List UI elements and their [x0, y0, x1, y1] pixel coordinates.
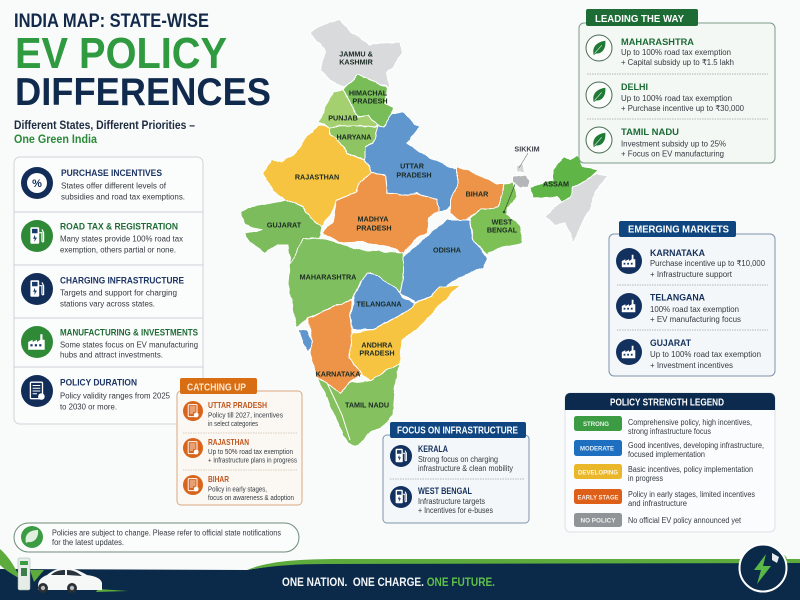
tab: emerging markets: [619, 221, 736, 237]
state: Rajasthan: Up to 50% road tax exemption: [208, 449, 293, 456]
legend: moderate: Good incentives, developing infrastructure,: [628, 441, 764, 450]
state: Madhya Pradesh: PRADESH: [356, 224, 392, 232]
footer band: [0, 544, 800, 600]
legend header: [565, 393, 775, 410]
state: Uttar Pradesh: PRADESH: [396, 170, 432, 180]
legend: early stage: [574, 489, 755, 508]
panel background: [14, 157, 203, 424]
state: Tamil Nadu: + Focus on EV manufacturing: [621, 150, 724, 158]
row: purchase incentives: subsidies and road tax exemptions.: [61, 192, 185, 202]
icon: green leaf: [21, 526, 43, 548]
state: Goa: [298, 329, 313, 353]
subtitle: Different States, Different Priorities –: [14, 120, 196, 132]
row: purchase incentives: [21, 167, 185, 202]
state: Karnataka: + Infrastructure support: [650, 270, 733, 279]
tab: catching up: CATCHING UP: [187, 382, 246, 394]
panel: emerging markets: [609, 221, 775, 376]
row: road tax and registration: [21, 220, 183, 254]
state: Kerala: KERALA: [418, 444, 448, 454]
state: Maharashtra: [288, 238, 405, 328]
state: Gujarat: GUJARAT: [650, 338, 691, 349]
state: Odisha: [400, 220, 488, 302]
tab: focus on infrastructure: [390, 422, 526, 438]
panel background: [177, 391, 302, 505]
state: Tamil Nadu: Investment subsidy up to 25%: [621, 140, 726, 148]
state: Tamil Nadu: [586, 127, 726, 158]
state: Tamil Nadu and Kerala: TAMIL NADU: [345, 400, 389, 410]
panel: focus on infrastructure: [383, 422, 529, 523]
panel: catching up: [177, 378, 302, 505]
state: Karnataka: [616, 248, 766, 279]
state: Tamil Nadu and Kerala: [317, 363, 400, 447]
legend: moderate: [574, 440, 764, 459]
legend: no policy: No official EV policy announced yet: [628, 516, 742, 525]
state: Telangana: + EV manufacturing focus: [650, 315, 741, 324]
state: Uttar Pradesh: UTTAR PRADESH: [208, 401, 267, 410]
state: Punjab: PUNJAB: [328, 114, 358, 122]
state: Odisha: ODISHA: [433, 246, 461, 254]
legend: developing: [574, 464, 753, 483]
state: Rajasthan: RAJASTHAN: [208, 438, 249, 447]
map of India: [240, 20, 607, 447]
state: Delhi: + Purchase incentive up to ₹30,000: [621, 104, 745, 113]
state: Gujarat: [240, 200, 322, 265]
state: Himachal Pradesh: [343, 75, 393, 127]
panel background: [609, 234, 775, 376]
title block: [14, 11, 271, 146]
legend: developing: DEVELOPING: [578, 470, 618, 476]
state: Bihar: focus on awareness & adoption: [208, 495, 294, 502]
panel: policy factors: [14, 157, 203, 424]
row: purchase incentives: States offer different levels of: [61, 182, 167, 190]
state: Karnataka: [308, 300, 362, 393]
state: West Bengal: [470, 182, 523, 255]
panel: policy strength legend: [565, 393, 775, 532]
panel background: [565, 393, 775, 532]
panel background: [579, 23, 775, 163]
legend: moderate: focused implementation: [628, 450, 705, 459]
state: Gujarat: + Investment incentives: [650, 361, 733, 370]
state: Gujarat: GUJARAT: [267, 220, 302, 230]
state: West Bengal: WEST: [492, 218, 513, 226]
state: Rajasthan: [263, 125, 372, 227]
state: Haryana: [330, 126, 378, 160]
icon: EV charger: [18, 558, 30, 590]
state: West Bengal: + Incentives for e-buses: [418, 506, 493, 515]
state: Kerala: [390, 444, 513, 473]
legend: early stage: Policy in early stages, limited incentives: [628, 490, 755, 499]
state: Bihar: BIHAR: [466, 190, 489, 198]
legend: strong: Comprehensive policy, high incentives,: [628, 418, 752, 427]
row: purchase incentives: %: [32, 178, 42, 190]
state: Telangana: 100% road tax exemption: [650, 305, 739, 314]
state: Tamil Nadu: TAMIL NADU: [621, 127, 679, 138]
state: Madhya Pradesh: [322, 173, 438, 255]
row: road tax and registration: exemption, others partial or none.: [60, 246, 176, 254]
row: manufacturing and investments: [21, 326, 198, 360]
state: Maharashtra: MAHARASHTRA: [621, 37, 694, 48]
state: Assam: ASSAM: [543, 180, 569, 188]
legend: early stage: EARLY STAGE: [578, 494, 619, 502]
row: policy duration: POLICY DURATION: [60, 378, 137, 388]
legend: developing: in progress: [628, 474, 663, 483]
state: Jammu and Kashmir: JAMMU &: [339, 50, 373, 58]
row: road tax and registration: ROAD TAX & REGISTRATION: [60, 222, 178, 232]
legend: moderate: MODERATE: [580, 446, 614, 452]
disclaimer note: [14, 523, 299, 552]
tab: focus on infrastructure: FOCUS ON INFRASTRUCTURE: [397, 426, 518, 436]
state: Haryana: HARYANA: [336, 132, 372, 142]
state: Uttar Pradesh: UTTAR: [400, 162, 425, 170]
row: manufacturing and investments: hubs and attract investments.: [60, 350, 163, 360]
legend: strong: [574, 416, 752, 436]
legend: early stage: and infrastructure: [628, 499, 687, 508]
state: West Bengal: Infrastructure targets: [418, 497, 485, 506]
state: Assam: [530, 155, 598, 202]
title line: EV policy: EV POLICY: [15, 29, 227, 78]
state: West Bengal: [390, 486, 493, 515]
state: Rajasthan: [183, 438, 297, 464]
state: Uttar Pradesh: [365, 113, 457, 212]
disclaimer note: for the latest updates.: [52, 538, 124, 547]
legend: no policy: NO POLICY: [580, 518, 616, 524]
state: Kerala: infrastructure & clean mobility: [418, 464, 513, 473]
row: purchase incentives: PURCHASE INCENTIVES: [61, 168, 162, 179]
row: manufacturing and investments: Some states focus on EV manufacturing: [60, 340, 198, 350]
row: manufacturing and investments: MANUFACTURING & INVESTMENTS: [60, 328, 198, 338]
north-east states: [545, 173, 607, 242]
title line: differences: DIFFERENCES: [15, 71, 271, 114]
tab: leading the way: [586, 9, 698, 26]
panel background: [383, 435, 529, 523]
row: policy duration: Policy validity ranges from 2025: [60, 392, 171, 400]
tagline: ONE NATION. ONE CHARGE. ONE FUTURE.: [282, 575, 495, 589]
state: Uttar Pradesh: in select categories: [208, 421, 258, 428]
icon: lightning badge: [740, 544, 787, 592]
state: West Bengal: BENGAL: [487, 226, 518, 234]
state: Rajasthan: + Infrastructure plans in progress: [208, 458, 297, 464]
state: Punjab: [318, 90, 378, 128]
state: West Bengal: WEST BENGAL: [418, 486, 472, 496]
row: policy duration: to 2030 or more.: [60, 402, 117, 412]
row: charging infrastructure: stations vary across states.: [60, 300, 155, 308]
tab: emerging markets: EMERGING MARKETS: [628, 224, 729, 236]
panel: leading the way: [579, 9, 775, 163]
row: charging infrastructure: Targets and support for charging: [60, 288, 177, 298]
state: Karnataka: Purchase incentive up to ₹10,000: [650, 259, 766, 268]
state: Uttar Pradesh: [183, 401, 283, 428]
state: Maharashtra: MAHARASHTRA: [300, 272, 356, 282]
state: Himachal Pradesh: PRADESH: [352, 96, 388, 106]
state: Telangana: [616, 292, 741, 324]
title line: India map: INDIA MAP: STATE-WISE: [14, 11, 209, 32]
state: Bihar: [450, 167, 505, 222]
state: Maharashtra: + Capital subsidy up to ₹1.5 lakh: [621, 58, 734, 67]
state: Gujarat: [616, 338, 761, 370]
legend: developing: Basic incentives, policy implementation: [628, 465, 753, 474]
state: Gujarat: Up to 100% road tax exemption: [650, 350, 761, 359]
state: Andhra Pradesh: PRADESH: [359, 348, 395, 358]
state: Telangana: TELANGANA: [650, 292, 705, 304]
state: Bihar: Policy in early stages,: [208, 486, 267, 494]
state: Sikkim: [513, 144, 540, 188]
row: road tax and registration: Many states provide 100% road tax: [60, 234, 183, 244]
state: Karnataka: KARNATAKA: [316, 370, 360, 378]
icon: white car: [38, 568, 102, 593]
state: Bihar: BIHAR: [208, 475, 229, 484]
row: policy duration: [21, 375, 171, 412]
state: Maharashtra: [586, 35, 734, 67]
state: Sikkim: SIKKIM: [514, 144, 540, 154]
state: Madhya Pradesh: MADHYA: [358, 214, 388, 224]
row: charging infrastructure: [21, 273, 184, 308]
state: Delhi: DELHI: [621, 82, 648, 93]
tab: leading the way: LEADING THE WAY: [595, 14, 684, 25]
state: Rajasthan: RAJASTHAN: [295, 172, 339, 182]
state: Uttar Pradesh: Policy till 2027, incentives: [208, 412, 283, 420]
state: Karnataka: KARNATAKA: [650, 248, 705, 259]
state: Himachal Pradesh: HIMACHAL: [349, 88, 388, 98]
state: Telangana: TELANGANA: [356, 300, 402, 308]
state: Delhi: Up to 100% road tax exemption: [621, 94, 732, 103]
legend: strong: strong infrastructure focus: [628, 427, 711, 436]
legend: no policy: [574, 513, 742, 527]
state: Bihar: [183, 475, 294, 502]
state: Telangana: [350, 273, 416, 330]
state: Kerala: Strong focus on charging: [418, 455, 498, 464]
state: Andhra Pradesh: [348, 285, 460, 380]
state: Jammu and Kashmir: [310, 20, 402, 88]
state: Jammu and Kashmir: KASHMIR: [339, 58, 374, 66]
state: Delhi: [586, 82, 745, 113]
state: Andhra Pradesh: ANDHRA: [361, 340, 393, 350]
state: Maharashtra: Up to 100% road tax exemption: [621, 48, 731, 57]
row: charging infrastructure: CHARGING INFRASTRUCTURE: [60, 276, 184, 286]
legend header: POLICY STRENGTH LEGEND: [610, 398, 724, 408]
subtitle green line: One Green India: [14, 134, 98, 146]
disclaimer note: Policies are subject to change. Please refer to official state notifications: [52, 528, 281, 538]
legend: strong: STRONG: [583, 421, 609, 428]
